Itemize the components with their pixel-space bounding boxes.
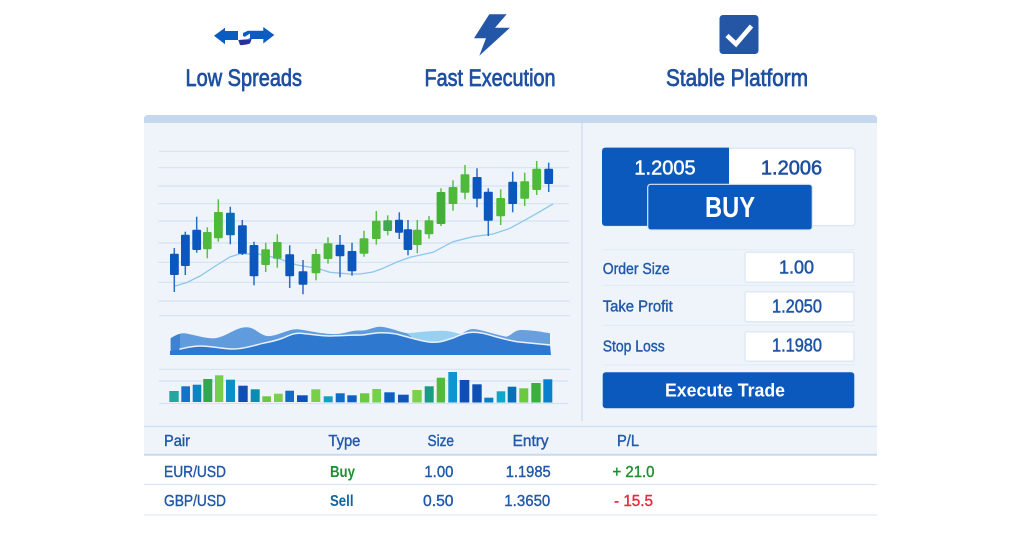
row: EUR/USD: + 21.0 — [612, 464, 655, 481]
bid price: 1.2005 — [634, 158, 696, 180]
execute trade button — [603, 372, 854, 408]
field: stop loss — [603, 332, 854, 361]
feature: fast execution — [424, 14, 556, 92]
row: GBP/USD: - 15.5 — [614, 493, 653, 510]
row: GBP/USD: Sell — [330, 493, 354, 510]
heading: stable platform: Stable Platform — [666, 65, 808, 92]
icon: opposing arrows — [214, 27, 274, 45]
field: take profit: Take Profit — [603, 299, 673, 316]
icon: check box — [720, 15, 758, 54]
field: take profit — [603, 292, 854, 322]
row: GBP/USD: GBP/USD — [164, 493, 226, 510]
chart: area wave — [159, 316, 570, 355]
table header — [164, 433, 639, 450]
field: order size: 1.00 — [779, 257, 814, 277]
table header: Type — [328, 433, 360, 450]
row: EUR/USD — [164, 464, 655, 481]
table header: Entry — [513, 433, 549, 450]
heading: fast execution: Fast Execution — [424, 65, 556, 92]
panel header bar — [144, 115, 877, 123]
row: GBP/USD: 0.50 — [423, 493, 454, 510]
moving average line — [175, 204, 553, 286]
field: stop loss: Stop Loss — [603, 338, 665, 356]
buy button: BUY — [705, 192, 755, 224]
execute trade button: Execute Trade — [665, 381, 785, 401]
feature: stable platform — [666, 15, 808, 92]
heading: low spreads: Low Spreads — [186, 65, 302, 92]
bid price panel — [602, 148, 729, 226]
field: order size: Order Size — [603, 261, 670, 278]
chart: candlesticks — [158, 151, 570, 301]
table header: P/L — [617, 433, 639, 450]
table header: Pair — [164, 433, 191, 450]
row: EUR/USD: 1.1985 — [506, 464, 551, 481]
row: EUR/USD: 1.00 — [424, 464, 453, 481]
feature: low spreads — [186, 27, 302, 92]
row: GBP/USD: 1.3650 — [504, 493, 550, 510]
field: stop loss: 1.1980 — [772, 336, 822, 356]
field: order size — [603, 252, 854, 282]
icon: lightning bolt — [474, 14, 510, 56]
field: take profit: 1.2050 — [772, 296, 822, 316]
chart: volume bars — [159, 369, 570, 404]
table header: Size — [428, 433, 454, 450]
quote box — [602, 148, 855, 230]
row: EUR/USD: Buy — [330, 464, 355, 481]
row: GBP/USD — [164, 493, 653, 510]
buy button — [648, 184, 812, 230]
ask price: 1.2006 — [761, 158, 822, 180]
row: EUR/USD: EUR/USD — [164, 464, 226, 481]
panel: trading terminal — [144, 115, 877, 454]
positions table — [144, 426, 877, 515]
